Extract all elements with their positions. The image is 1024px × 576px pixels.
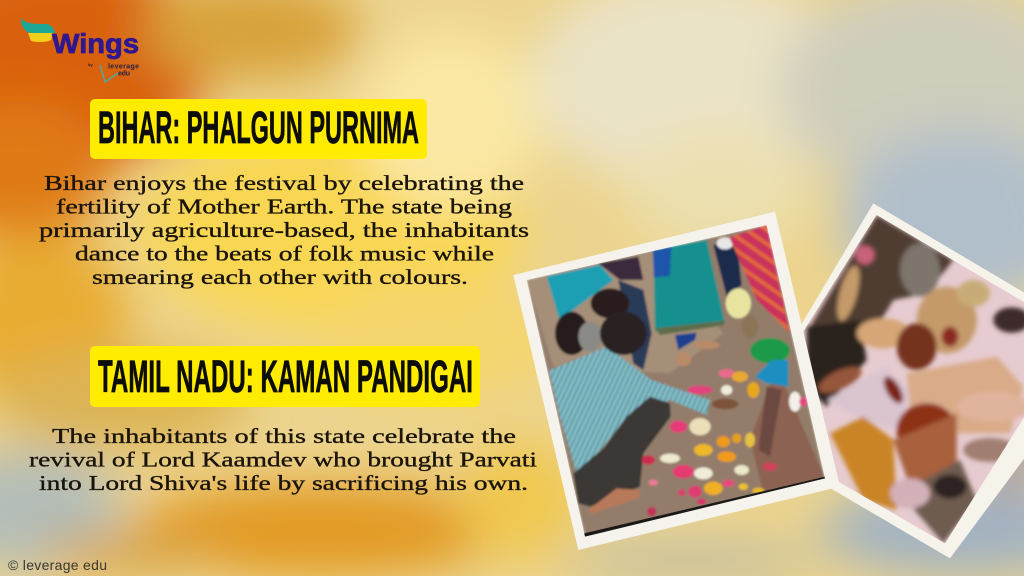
wooden post bbox=[758, 387, 782, 457]
icon: logo wing bbox=[21, 18, 55, 42]
teal kurta bbox=[653, 240, 725, 332]
copyright footer: © leverage edu bbox=[8, 557, 107, 573]
text block: Bihar description: smearing each other with colours. bbox=[92, 265, 468, 289]
blue cloth bbox=[755, 360, 788, 387]
text block: Bihar description bbox=[39, 171, 529, 289]
girl with dark hair bbox=[591, 288, 629, 318]
bare foot bbox=[588, 488, 640, 514]
man's trousers bbox=[573, 397, 671, 507]
photo frame bbox=[513, 212, 840, 550]
photo: flower offering at Holi bbox=[513, 212, 840, 550]
text block: Bihar description: dance to the beats of folk music while bbox=[75, 242, 494, 266]
text block: Tamil Nadu description: into Lord Shiva's life by sacrificing his own. bbox=[39, 471, 528, 495]
text block: Tamil Nadu description bbox=[29, 424, 537, 495]
text block: Bihar description: primarily agriculture-based, the inhabitants bbox=[39, 218, 529, 242]
heading: Tamil Nadu: TAMIL NADU: KAMAN PANDIGAI bbox=[98, 351, 473, 402]
flowers and basket bbox=[726, 288, 751, 318]
logo wordmark: Wings bbox=[52, 28, 139, 59]
logo: Wings by leverage edu bbox=[21, 18, 139, 82]
standing person in jeans bbox=[598, 257, 643, 280]
heading: Bihar bbox=[90, 99, 427, 159]
text block: Bihar description: Bihar enjoys the festival by celebrating the bbox=[44, 171, 524, 195]
man's head bbox=[600, 312, 647, 355]
logo byline: leverage bbox=[108, 64, 139, 70]
logo byline: edu bbox=[118, 70, 130, 78]
text block: Bihar description: fertility of Mother Earth. The state being bbox=[56, 194, 513, 218]
arm and hand bbox=[712, 399, 738, 409]
child bbox=[713, 240, 742, 297]
heading: Bihar: BIHAR: PHALGUN PURNIMA bbox=[98, 102, 419, 153]
text block: Tamil Nadu description: revival of Lord Kaamdev who brought Parvati bbox=[29, 448, 537, 472]
text block: Tamil Nadu description: The inhabitants of this state celebrate the bbox=[52, 424, 516, 448]
logo byline: by bbox=[88, 62, 93, 67]
green cloth bbox=[750, 338, 790, 363]
man's shirt bbox=[549, 347, 710, 473]
flower petals bbox=[642, 369, 807, 516]
teal cloth bbox=[547, 265, 613, 322]
logo byline bbox=[88, 62, 139, 82]
striped sari bbox=[729, 225, 790, 333]
heading: Tamil Nadu bbox=[90, 346, 480, 407]
photo: Narasimha painting bbox=[802, 204, 1024, 558]
dark bottom strip bbox=[584, 477, 827, 539]
